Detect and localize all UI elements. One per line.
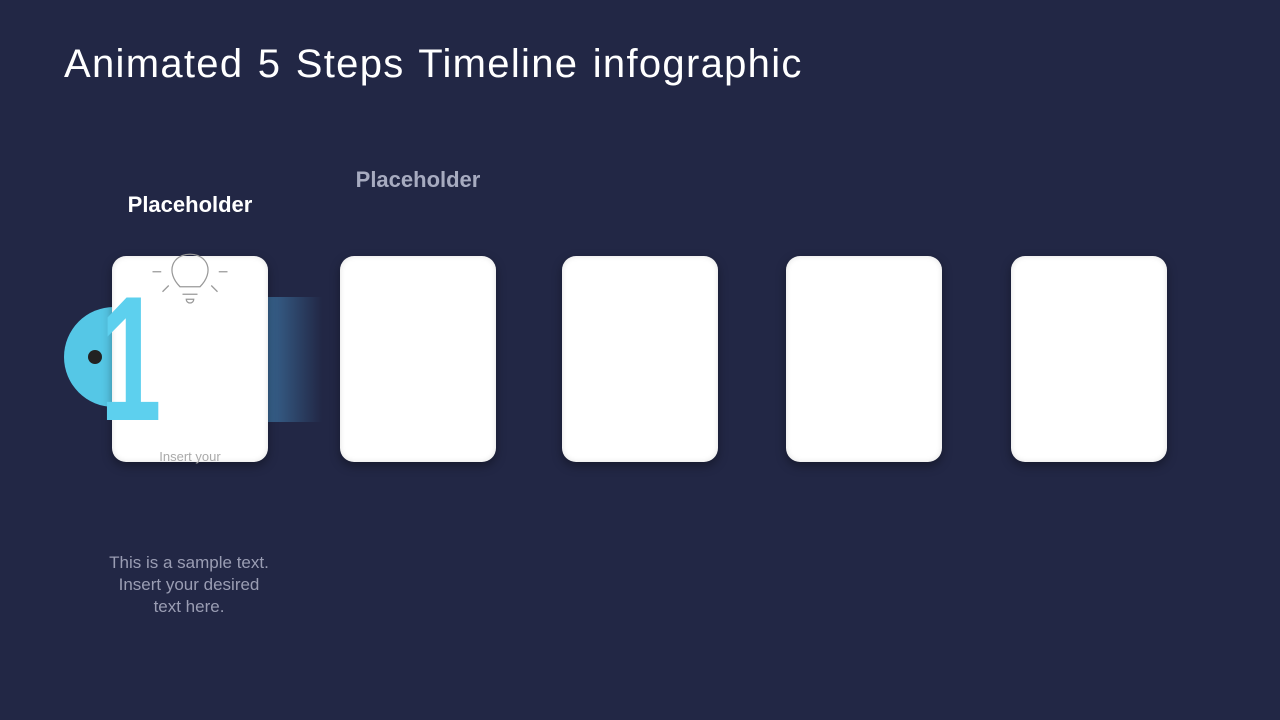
description text [109,553,269,616]
card 4 [786,256,942,462]
icon: light bulb [152,254,228,304]
number 1: 1 [100,259,161,458]
description text: text here. [154,597,224,616]
description text: This is a sample text. [109,553,269,572]
card 1 [112,256,268,462]
card text: Insert your [159,449,221,464]
heading: step 2: Placeholder [356,167,480,192]
card 2 [340,256,496,462]
teal circle [64,307,164,407]
dot [88,350,102,364]
card 3 [562,256,718,462]
heading: step 1: Placeholder [128,192,252,217]
title: Animated 5 Steps Timeline infographic [64,42,803,86]
card 5 [1011,256,1167,462]
description text: Insert your desired [119,575,259,594]
connector bar [262,297,322,422]
